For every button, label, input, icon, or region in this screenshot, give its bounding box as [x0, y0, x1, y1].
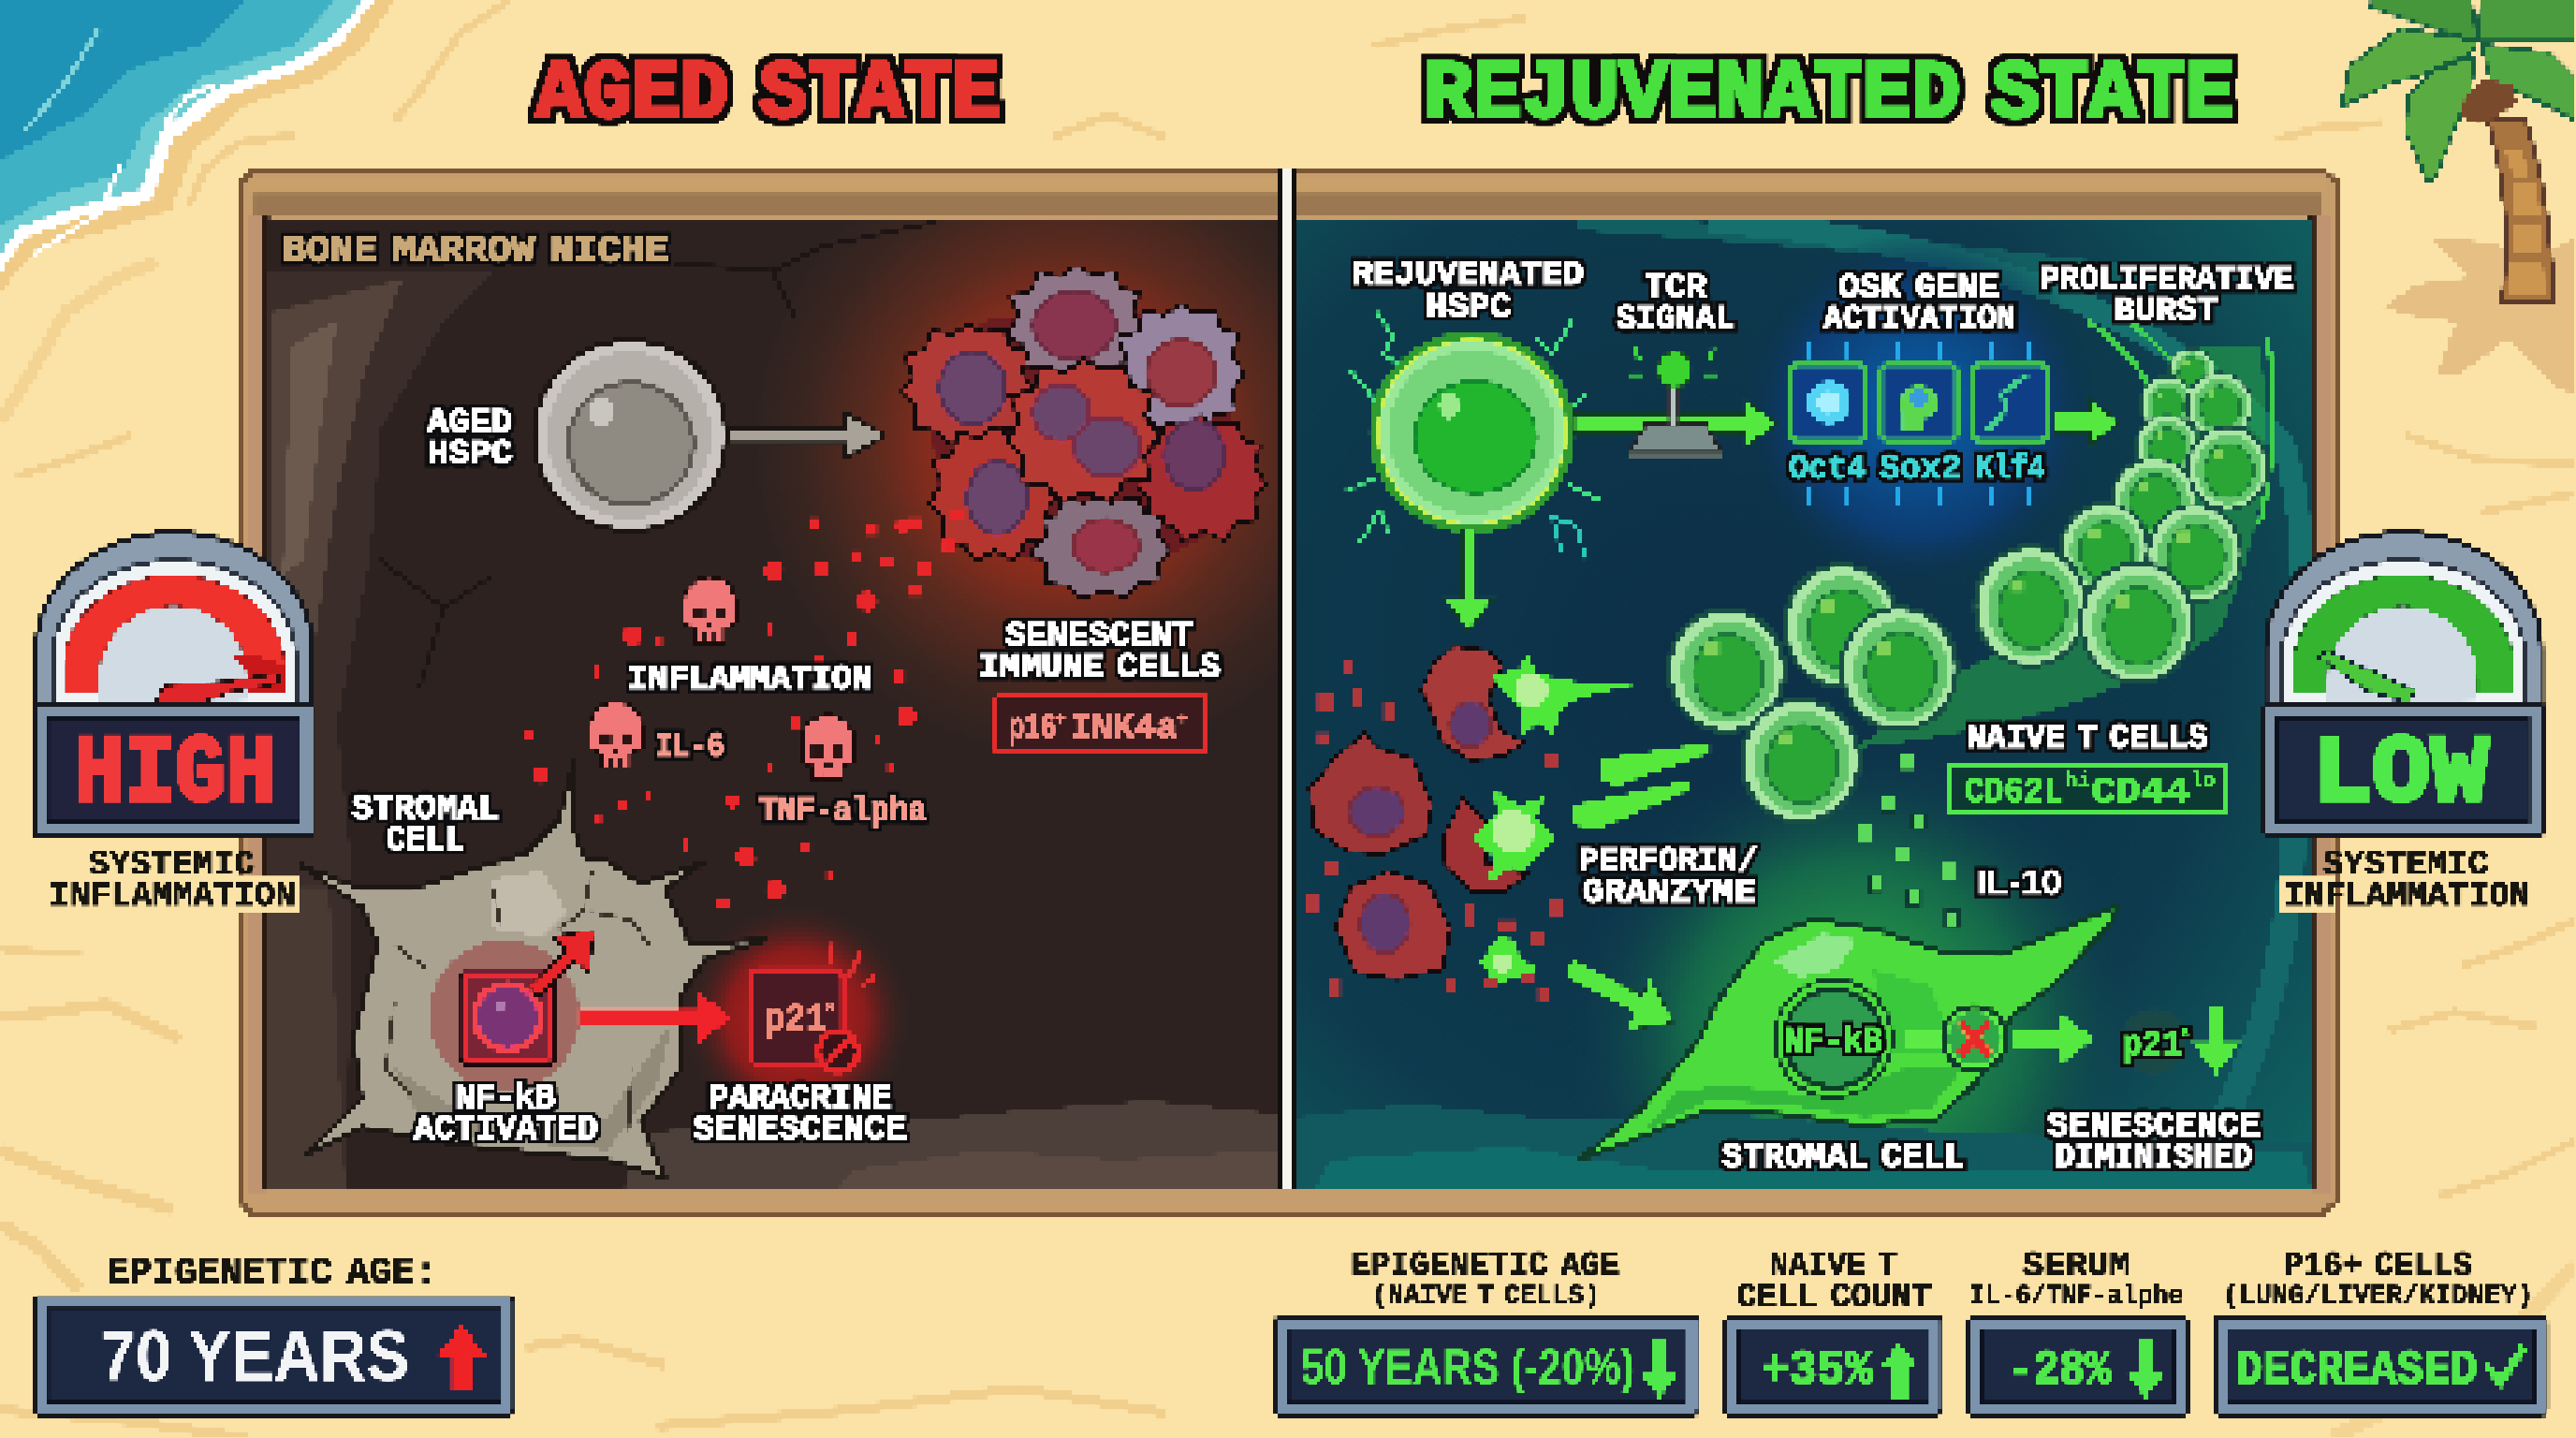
nucleus: NF-kB [1773, 977, 1895, 1099]
label: senescence diminished: SENESCENCE [2047, 1108, 2261, 1147]
text: NF-kB nucleus: NF-kB [1784, 1021, 1882, 1063]
red cell lower left [930, 425, 1054, 561]
metric: epigenetic age rejuvenated: 50 YEARS (-20%) [1301, 1340, 1634, 1395]
burst upper [1492, 654, 1640, 740]
palm crown [2461, 79, 2517, 125]
label: stromal cell: STROMAL [352, 790, 500, 829]
arrow: inhibited output [2011, 1014, 2095, 1064]
label: epigenetic age aged: EPIGENETIC AGE: [107, 1253, 437, 1296]
label: senescence diminished: DIMINISHED [2056, 1138, 2252, 1178]
label: paracrine senescence [694, 1079, 907, 1150]
metric: naive T cell count: NAIVE T [1769, 1247, 1897, 1286]
arrow: HSPC to senescent cells [729, 413, 887, 459]
metric: serum IL-6/TNF-alpha: IL-6/TNF-alphe [1969, 1280, 2184, 1312]
label: NF-kB activated: ACTIVATED [414, 1110, 598, 1150]
stat box: 70 years [35, 1297, 514, 1415]
grey cell bottom [1032, 493, 1170, 598]
label: perforin/granzyme: GRANZYME [1582, 874, 1756, 914]
senescent immune cell cluster [901, 266, 1266, 598]
label: IL-10: IL-10 [1976, 863, 2062, 902]
label: rejuvenated HSPC: REJUVENATED [1352, 257, 1584, 296]
label: rejuvenated HSPC [1352, 257, 1584, 329]
perforin streaks [1600, 742, 1710, 785]
palm tree [2341, 0, 2576, 392]
rejuvenated HSPC cell [1342, 312, 1602, 559]
aged stromal cell [299, 757, 768, 1178]
debris [1306, 661, 1562, 1001]
label: systemic inflammation left: INFLAMMATION [50, 877, 296, 917]
dead cell lower [1336, 871, 1451, 979]
cream patch behind left caption [240, 877, 299, 914]
label: TCR signal: TCR [1645, 270, 1707, 309]
metric box: p16+ cells [2215, 1318, 2546, 1415]
arrow: HSPC to OSK activation [1573, 399, 1778, 447]
arrow: debris to stromal cell [1567, 960, 1674, 1030]
red cell left [901, 324, 1034, 446]
dead cell mid [1442, 799, 1528, 892]
damaged senescent cells [1310, 646, 1528, 979]
label: TNF-alpha: TNF-alpha [759, 792, 927, 831]
label: systemic inflammation left [50, 846, 296, 917]
label: IL-6: IL-6 [655, 727, 724, 767]
perforin bursts [1306, 654, 1710, 1001]
label: proliferative burst [2041, 261, 2293, 331]
labels: OSK genes: Klf4 [1976, 450, 2045, 490]
metric: naive T cell count: +35% [1761, 1343, 1873, 1399]
metric: naive T cell count [1736, 1247, 1932, 1399]
label: OSK gene activation [1823, 270, 2016, 340]
titles [535, 50, 2234, 142]
red cell centre [1006, 359, 1159, 502]
label: aged HSPC [427, 404, 513, 475]
cluster backing [929, 312, 1232, 567]
palm shadow [2384, 237, 2576, 392]
text: p16 INK4a marker: p16 [1009, 708, 1057, 749]
metric: epigenetic age rejuvenated: (NAIVE T CELLS) [1372, 1280, 1600, 1312]
label: systemic inflammation right: SYSTEMIC [2323, 846, 2489, 886]
label: senescence diminished [2047, 1108, 2261, 1178]
label: proliferative burst: BURST [2115, 292, 2217, 331]
label: NF-kB activated [414, 1079, 598, 1150]
arrow: HSPC down to killing [1444, 529, 1493, 631]
label: stromal cell [352, 790, 500, 860]
floor [1296, 1105, 2153, 1184]
gene tile: Oct4 [1791, 365, 1866, 440]
cave wall [266, 271, 493, 1190]
label: senescent immune cells [979, 618, 1221, 688]
cream patch behind right caption [2280, 877, 2336, 914]
icon: skull IL-6 [590, 701, 642, 768]
text: p21 marker: s [825, 997, 836, 1018]
metric: serum IL-6/TNF-alpha: -28% [2008, 1343, 2112, 1399]
grey cell right [1115, 303, 1245, 433]
text: CD62L CD44 marker: lo [2190, 770, 2216, 794]
label: proliferative burst: PROLIFERATIVE [2041, 261, 2293, 301]
panel divider [1278, 168, 1298, 1190]
naive T cells [1669, 348, 2268, 822]
healthy stromal cell [1579, 905, 2117, 1160]
arrow down [2191, 1005, 2241, 1075]
label: OSK gene activation: OSK GENE [1838, 270, 1999, 309]
ocean waves corner [0, 0, 394, 292]
metric: epigenetic age rejuvenated: EPIGENETIC AGE [1351, 1247, 1620, 1286]
outlined panel labels [283, 230, 2293, 1178]
text: p21 diminished: s [2180, 1023, 2190, 1042]
label: rejuvenated HSPC: HSPC [1426, 289, 1512, 329]
label: aged HSPC: AGED [427, 404, 513, 444]
panel: rejuvenated niche [1296, 220, 2312, 1189]
gauge: low [2264, 533, 2543, 836]
metric: p16+ cells: DECREASED [2236, 1343, 2478, 1399]
p21 diminished [2121, 1005, 2241, 1075]
labels: OSK genes: Oct4 [1789, 450, 1866, 490]
OSK blue glow [1764, 239, 2073, 566]
grey cell top [1006, 266, 1146, 382]
label: paracrine senescence: SENESCENCE [694, 1110, 907, 1150]
metric: p16+ cells: (LUNG/LIVER/KIDNEY) [2223, 1280, 2533, 1312]
icon: blocked [818, 1032, 857, 1071]
red glow behind senescent cluster [723, 218, 1278, 761]
text: CD62L CD44 marker: hi [2065, 770, 2091, 794]
label: perforin/granzyme: PERFORIN/ [1579, 843, 1758, 882]
NF-kB nucleus [429, 940, 580, 1091]
label: systemic inflammation right: INFLAMMATION [2284, 877, 2530, 917]
ground [624, 1101, 1278, 1190]
title: aged state: AGED STATE [535, 50, 1001, 142]
burst middle [1472, 788, 1556, 884]
metric: naive T cell count: CELL COUNT [1736, 1278, 1932, 1317]
metric: serum IL-6/TNF-alpha: SERUM [2023, 1247, 2130, 1286]
marker box: p16 INK4a [996, 697, 1206, 751]
label: systemic inflammation right [2284, 846, 2530, 917]
text: p21 diminished: p21 [2123, 1025, 2182, 1066]
label: senescent immune cells: IMMUNE CELLS [979, 649, 1221, 688]
metric box: serum cytokines [1969, 1318, 2187, 1415]
label: bone marrow niche: BONE MARROW NICHE [283, 230, 668, 273]
paracrine glow [685, 907, 909, 1131]
gauge: high [35, 533, 314, 836]
icon: red up arrow [435, 1325, 488, 1388]
text: CD62L CD44 marker: CD44 [2091, 771, 2190, 813]
labels: OSK genes [1789, 450, 2045, 490]
label: stromal cell: CELL [386, 821, 465, 860]
dead cell top [1421, 646, 1525, 761]
arrow: NF-kB to p21 [578, 990, 731, 1045]
panel: aged bone marrow niche [266, 218, 1280, 1190]
text: p16 INK4a marker [1009, 708, 1188, 749]
stromal glow [1615, 791, 2092, 1133]
title: rejuvenated state: REJUVENATED STATE [1425, 50, 2234, 142]
gene tile: Sox2 [1881, 365, 1956, 440]
icon: skull TNF-alpha [801, 714, 855, 781]
metric: p16+ cells: P16+ CELLS [2284, 1247, 2472, 1286]
icon: TCR joystick [1630, 348, 1723, 460]
palm trunk [2487, 118, 2553, 302]
gene tile: Klf4 [1973, 365, 2047, 440]
label: naive T cells: NAIVE T CELLS [1967, 720, 2208, 759]
text: CD62L CD44 marker [1965, 770, 2216, 813]
label: systemic inflammation left: SYSTEMIC [89, 846, 255, 886]
IL-10 particles [1858, 755, 1958, 929]
palm fronds [2341, 0, 2576, 183]
text: CD62L CD44 marker: CD62L [1965, 771, 2063, 813]
text: p16 INK4a marker: + [1055, 709, 1066, 731]
arrow: OSK to proliferative burst [2054, 399, 2119, 446]
label: TCR signal [1617, 270, 1734, 340]
red cell right lower [1135, 416, 1266, 540]
metric: serum IL-6/TNF-alpha [1969, 1247, 2184, 1399]
gene tiles: OSK [1791, 342, 2047, 505]
label: TCR signal: SIGNAL [1617, 301, 1734, 340]
metric box: epigenetic age [1275, 1318, 1699, 1415]
label: aged HSPC: HSPC [427, 435, 513, 475]
text: p16 INK4a marker: + [1177, 709, 1188, 731]
text: p16 INK4a marker: INK4a [1070, 708, 1178, 749]
burst lower [1480, 936, 1538, 983]
text: p21 marker: p21 [764, 997, 827, 1042]
dead cell left [1310, 733, 1432, 855]
inhibitor [1940, 1004, 2009, 1073]
cave swirls [1577, 222, 2303, 1151]
label: inflammation: INFLAMMATION [627, 660, 872, 699]
label: perforin/granzyme [1579, 843, 1758, 914]
metric box: naive T cell count [1725, 1318, 1942, 1415]
label: stromal cell right: STROMAL CELL [1721, 1138, 1965, 1178]
label: NF-kB activated: NF-kB [455, 1079, 555, 1119]
label: paracrine senescence: PARACRINE [708, 1079, 892, 1119]
metric: epigenetic age rejuvenated [1301, 1247, 1634, 1395]
aged HSPC cell [534, 340, 726, 531]
cracks [378, 222, 936, 690]
value: 70 years: 70 YEARS [100, 1315, 409, 1396]
readout: HIGH: HIGH [74, 721, 276, 829]
arrow: NF-kB up-right [529, 930, 594, 997]
icon: skull inflammation [683, 577, 736, 642]
readout: LOW: LOW [2313, 721, 2490, 829]
label: OSK gene activation: ACTIVATION [1823, 301, 2016, 340]
marker box: CD62L CD44 [1950, 764, 2226, 814]
proliferating naive T cell swoosh [1856, 312, 2274, 748]
labels: OSK genes: Sox2 [1880, 450, 1962, 490]
wooden frame [238, 168, 2339, 1218]
p21 marker box [751, 943, 875, 1064]
label: senescent immune cells: SENESCENT [1005, 618, 1193, 657]
inflammatory particles [526, 509, 964, 907]
metric: p16+ cells [2223, 1247, 2533, 1399]
